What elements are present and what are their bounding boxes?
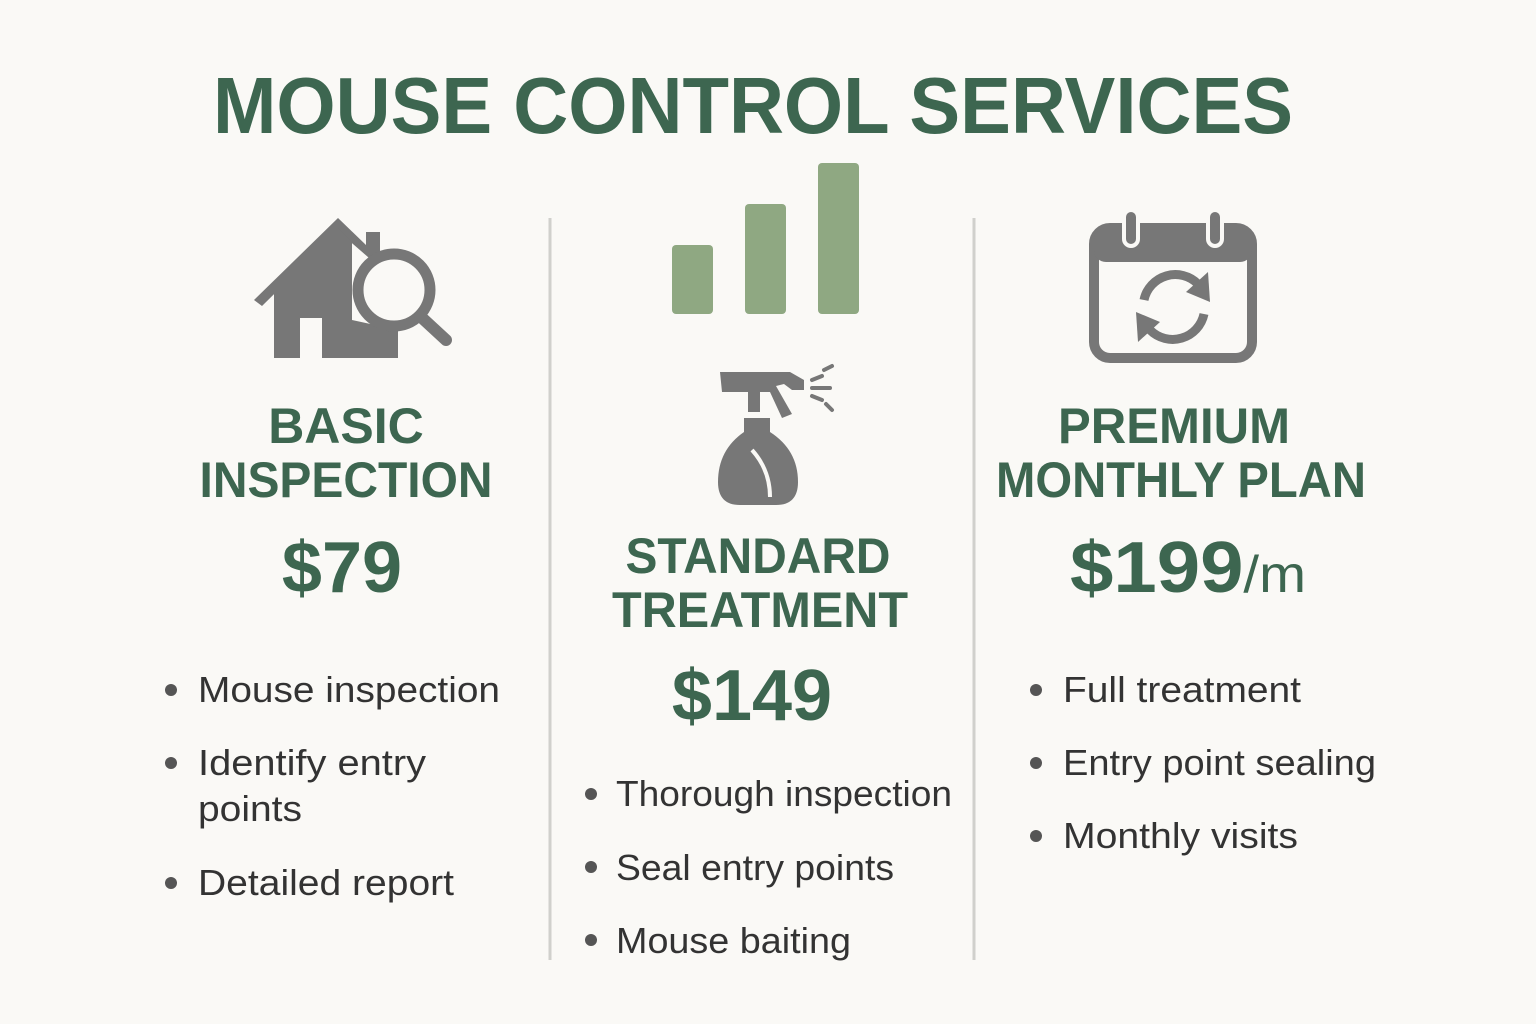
- bullet list: [1030, 669, 1376, 856]
- heading: [200, 398, 492, 508]
- icon: spray bottle: [718, 366, 832, 505]
- heading: MONTHLY PLAN: [996, 452, 1366, 508]
- heading: INSPECTION: [200, 452, 492, 508]
- heading: [612, 528, 908, 638]
- panel: standard treatment: [585, 163, 952, 961]
- bullet list: Monthly visits: [1063, 815, 1298, 856]
- bullet list: Mouse baiting: [616, 920, 851, 961]
- panel: basic inspection: [165, 218, 500, 903]
- bullet list: Seal entry points: [616, 847, 894, 888]
- bullet list: points: [198, 788, 302, 829]
- panel: premium monthly plan: [996, 210, 1376, 856]
- price: $199 /m: [1070, 528, 1306, 608]
- bullet list: Mouse inspection: [198, 669, 500, 710]
- bullet list: Full treatment: [1063, 669, 1301, 710]
- bullet list: Thorough inspection: [616, 773, 952, 814]
- icon: calendar with refresh: [1094, 210, 1252, 358]
- heading: [996, 398, 1366, 508]
- bullet list: Detailed report: [198, 862, 454, 903]
- bullet list: Identify entry: [198, 742, 426, 783]
- icon: bar chart: [672, 163, 859, 314]
- heading: BASIC: [268, 398, 424, 454]
- price: $79: [282, 528, 402, 608]
- heading: PREMIUM: [1058, 398, 1290, 454]
- bullet list: Entry point sealing: [1063, 742, 1376, 783]
- icon: house with magnifier: [254, 218, 446, 358]
- bullet list: [165, 669, 500, 903]
- heading: STANDARD: [626, 528, 890, 584]
- heading: TREATMENT: [612, 582, 908, 638]
- title: MOUSE CONTROL SERVICES: [213, 61, 1293, 150]
- bullet list: [585, 773, 952, 961]
- price: $149: [672, 656, 832, 736]
